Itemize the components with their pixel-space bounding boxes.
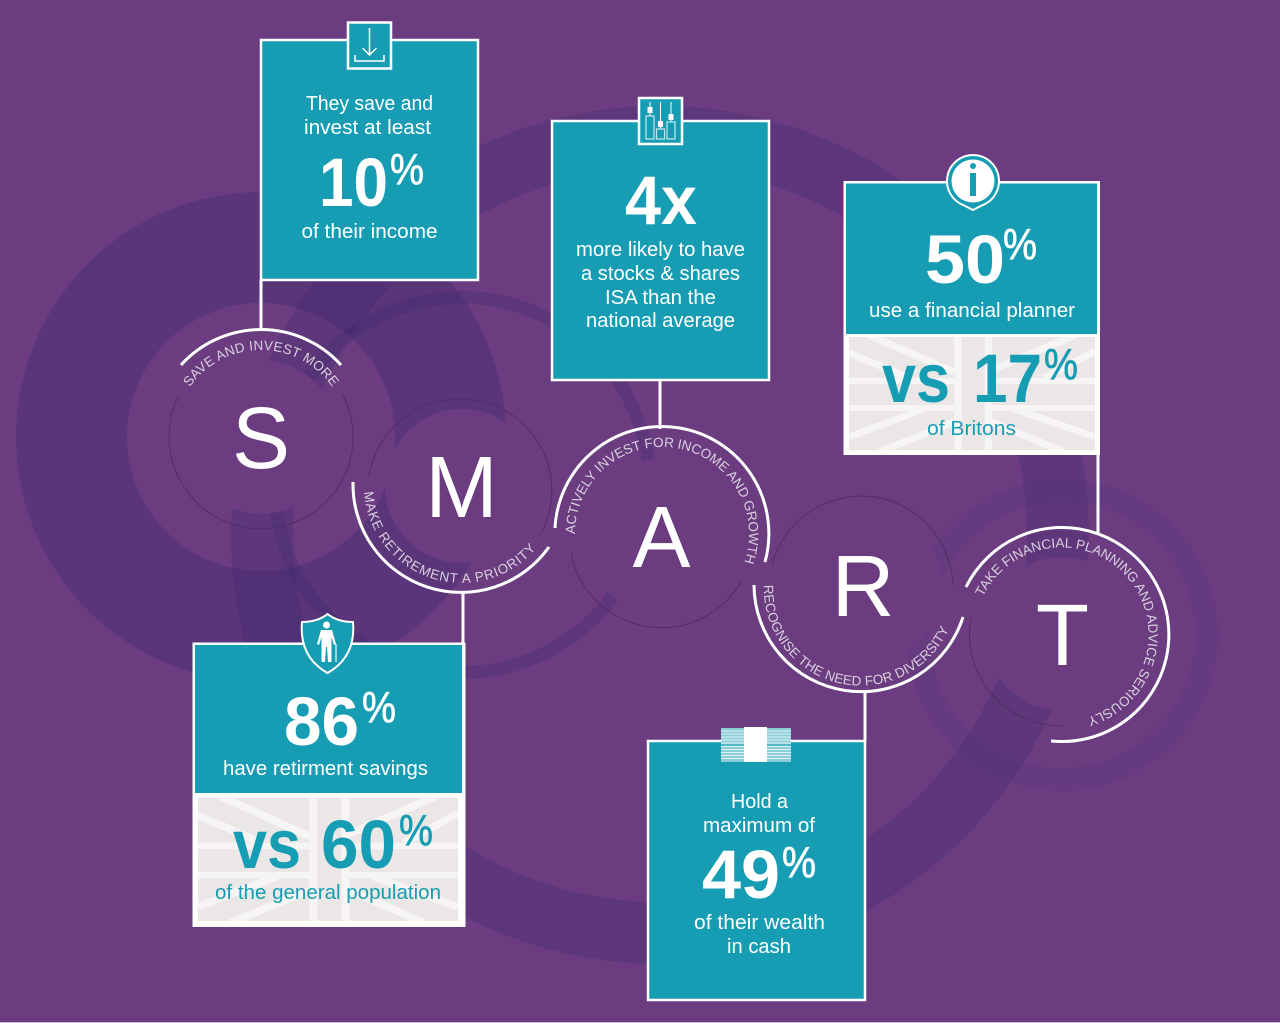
stat: vs 60%: 60 (321, 806, 396, 883)
stat: 4x: 4x (625, 162, 697, 239)
panel: save 10% (261, 22, 478, 280)
flag background (198, 796, 458, 923)
letter T with arc label: TAKE FINANCIAL PLANNING AND ADVICE SERIOUSLY (974, 538, 1158, 726)
stat: 49% (702, 836, 816, 913)
icon: banknote bundle (721, 727, 791, 762)
text: more likely: a stocks & shares (581, 263, 740, 285)
letter T with arc label: T (1036, 587, 1089, 684)
letter R with arc label: RECOGNISE THE NEED FOR DIVERSITY (764, 586, 948, 686)
stat: 49%: 49 (702, 836, 780, 913)
text: of the general population: of the general population (215, 882, 441, 904)
icon: download (348, 22, 391, 68)
panel: 50% financial planner (844, 155, 1100, 455)
stat: 50%: % (1003, 220, 1037, 269)
stat: 10%: 10 (319, 144, 388, 221)
text: they save and invest: They save and (306, 93, 433, 115)
stat: vs 17%: % (1044, 340, 1078, 389)
stat: 86% (284, 683, 396, 760)
stat: 50%: 50 (925, 221, 1005, 298)
panel: 4x stocks and shares (552, 98, 769, 380)
stat: 49%: % (782, 838, 816, 887)
stat: vs 17% (882, 340, 1078, 417)
connector lines (261, 280, 1098, 741)
text: of their income: of their income (302, 221, 438, 243)
text: of Britons: of Britons (927, 418, 1016, 440)
stat: vs 60%: % (399, 806, 433, 855)
flag background (849, 335, 1095, 452)
text: more likely (576, 239, 745, 332)
panel: 49% wealth in cash (648, 727, 865, 1000)
stat: 10%: % (390, 145, 424, 194)
letter M with arc label: M (425, 439, 498, 536)
text: hold a maximum of: Hold a (731, 791, 789, 813)
letter A with arc label: A (632, 489, 691, 586)
text: more likely: national average (586, 310, 735, 332)
stat: vs 60% (233, 806, 433, 883)
text: of their wealth in cash (694, 912, 825, 958)
stat: 50% (925, 220, 1037, 298)
text: of their wealth in cash: in cash (727, 936, 791, 958)
text: more likely: ISA than the (605, 287, 716, 309)
letter A with arc label (554, 425, 770, 628)
text: more likely: more likely to have (576, 239, 745, 261)
text: hold a maximum of (703, 791, 815, 837)
icon: information pin (947, 155, 999, 210)
letter A with arc label: ACTIVELY INVEST FOR INCOME AND GROWTH (566, 438, 758, 564)
letter R with arc label: R (832, 538, 894, 635)
icon: shield with person (302, 614, 353, 673)
panel: save 10%: invest at least (304, 117, 431, 139)
letter M with arc label: MAKE RETIREMENT A PRIORITY (364, 492, 534, 583)
text: use a financial planner: use a financial planner (869, 300, 1075, 322)
letter R with arc label (752, 496, 964, 694)
stat: 86%: 86 (284, 683, 359, 760)
panel: 86% retirement savings (192, 614, 466, 927)
letter M with arc label (351, 398, 552, 594)
text: have retirment savings: have retirment savings (223, 758, 428, 780)
stat: vs 17%: 17 (973, 340, 1042, 417)
letter S with arc label: SAVE AND INVEST MORE (184, 340, 340, 386)
stat: vs 17%: vs (882, 340, 950, 417)
text: hold a maximum of: maximum of (703, 815, 815, 837)
stat: 86%: % (362, 683, 396, 732)
letter S with arc label (168, 328, 354, 529)
stat: vs 60%: vs (233, 806, 301, 883)
text: of their wealth in cash: of their wealth (694, 912, 825, 934)
icon: candlesticks (639, 98, 682, 144)
letter S with arc label: S (232, 390, 290, 487)
